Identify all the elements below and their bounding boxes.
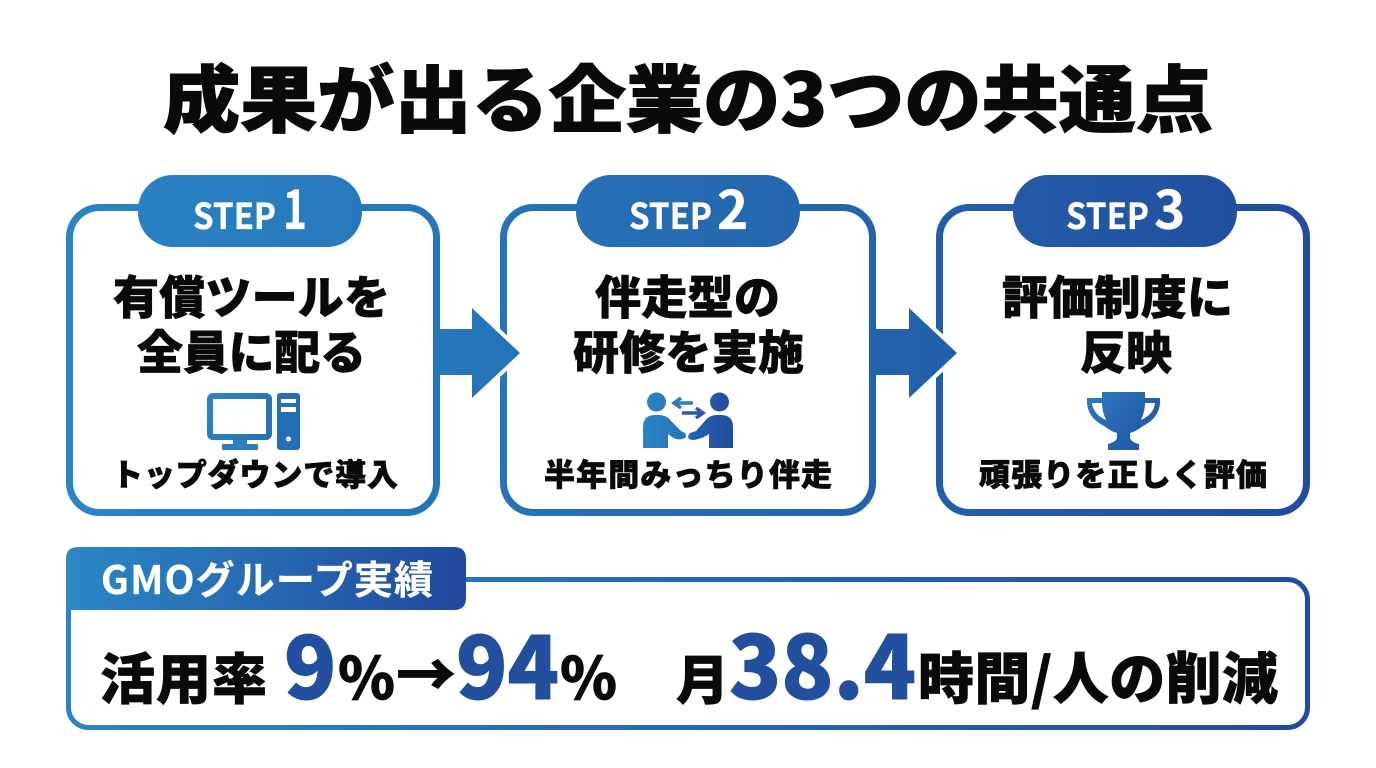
step 2 caption: 半年間みっちり伴走 [544, 450, 832, 495]
step 2 heading [573, 262, 804, 383]
step 2 heading: 伴走型の [595, 262, 780, 328]
metric: usage rate: 9 [284, 599, 336, 724]
step 1 badge: STEP [193, 188, 276, 240]
step 1 heading: 有償ツールを [113, 262, 390, 328]
icon: two people shaking hands [643, 392, 733, 448]
title: 成果が出る企業の3つの共通点 [163, 42, 1213, 148]
step 3 badge: 3 [1154, 169, 1185, 245]
results tag: GMOグループ実績 [101, 550, 433, 606]
panel: step 3 [940, 169, 1306, 512]
step 3 heading: 評価制度に [1002, 262, 1233, 328]
panel: step 2 [504, 169, 872, 512]
icon: computer [210, 393, 300, 450]
icon: trophy [1087, 392, 1160, 450]
metric: usage rate [100, 599, 617, 724]
step 1 badge [138, 169, 362, 247]
step 2 badge: STEP [629, 188, 712, 240]
metric: usage rate: → [396, 628, 456, 715]
step 1 badge: 1 [283, 169, 307, 245]
step 2 badge: 2 [717, 169, 748, 245]
step 3 badge [1013, 169, 1237, 247]
metric: usage rate: 94 [456, 599, 559, 724]
arrow: step 1 to step 2 [440, 303, 526, 403]
step 1 caption: トップダウンで導入 [112, 450, 398, 495]
metric: hours reduced [676, 599, 1278, 725]
step 3 heading [1002, 262, 1233, 383]
step 3 caption: 頑張りを正しく評価 [979, 450, 1267, 495]
step 1 heading: 全員に配る [137, 317, 366, 383]
step 2 badge [576, 169, 800, 247]
step 3 heading: 反映 [1080, 317, 1172, 383]
step 1 heading [113, 262, 390, 383]
metric: hours reduced: 38.4 [729, 599, 916, 725]
step 2 heading: 研修を実施 [573, 317, 804, 383]
metric: usage rate: % [338, 632, 395, 716]
panel: step 1 [70, 169, 436, 512]
metric: usage rate: 活用率 [100, 635, 267, 715]
panel: GMO group results [66, 547, 1308, 728]
metric: hours reduced: 時間/人の削減 [918, 635, 1278, 716]
results tag [66, 547, 466, 616]
metric: usage rate: % [560, 632, 617, 716]
arrow: step 2 to step 3 [876, 303, 963, 403]
step 3 badge: STEP [1066, 188, 1149, 240]
metric: hours reduced: 月 [676, 639, 729, 715]
